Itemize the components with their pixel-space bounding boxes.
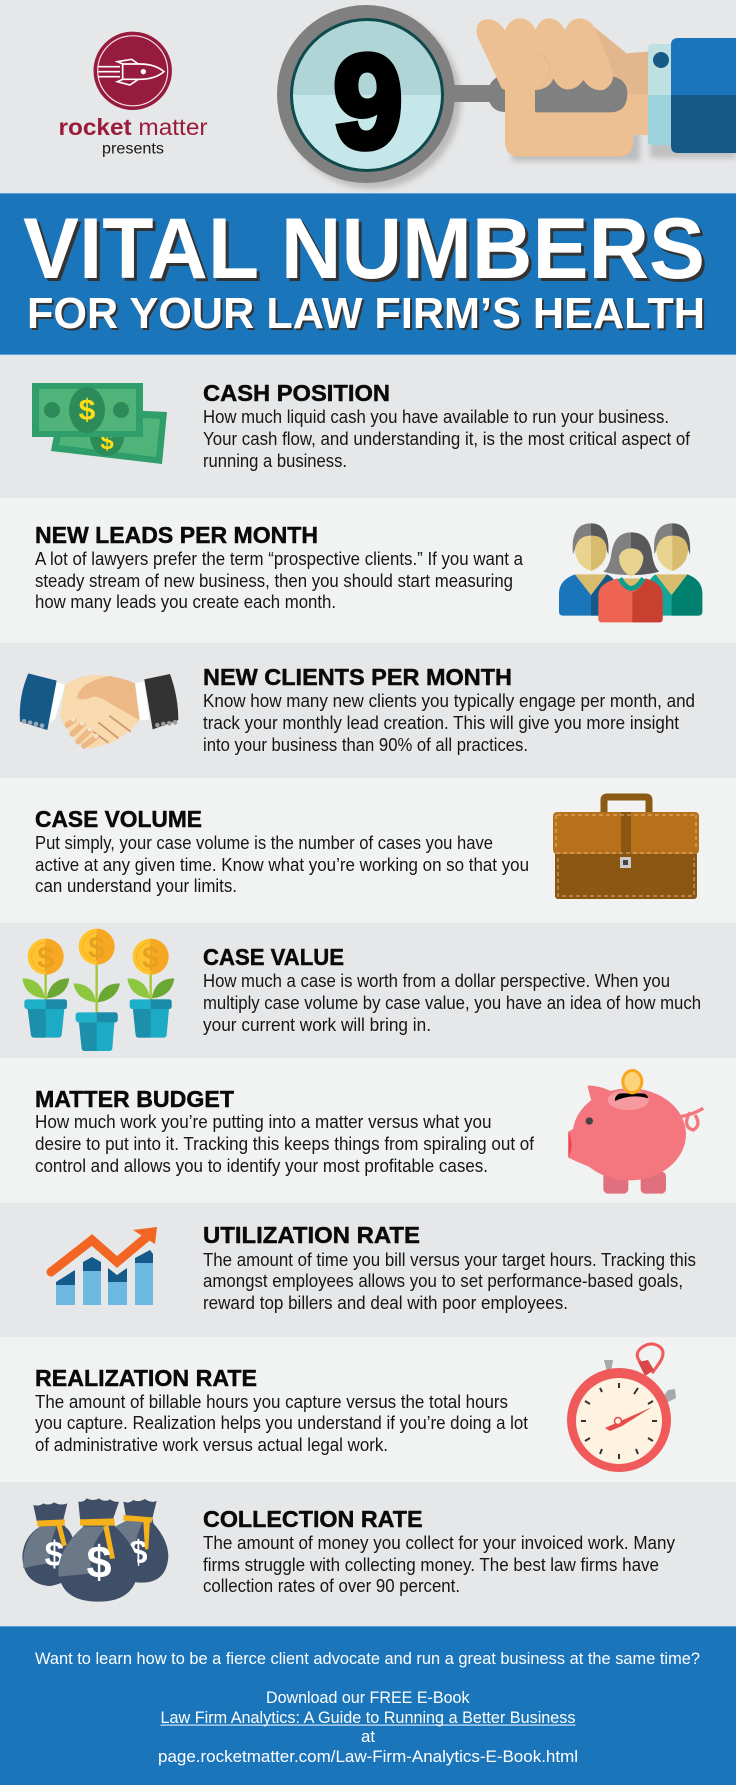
body text: control and allows you to identify your most profitable cases. <box>35 1156 488 1176</box>
body text <box>203 691 695 755</box>
logo: rocket matter: rocket matter <box>58 114 208 140</box>
body text: A lot of lawyers prefer the term “prospective clients.” If you want a <box>35 549 524 569</box>
body text: you capture. Realization helps you understand if you’re doing a lot <box>35 1413 528 1433</box>
heading: COLLECTION RATE <box>203 1506 422 1532</box>
body text: steady stream of new business, then you should start measuring <box>35 571 513 591</box>
body text <box>35 833 529 896</box>
footer download line: Download our FREE E-Book <box>266 1688 470 1707</box>
panel: realization rate <box>0 1337 736 1482</box>
icon: dollar bills: $ <box>100 428 114 455</box>
body text: How much a case is worth from a dollar perspective. When you <box>203 971 670 991</box>
panel: utilization rate <box>0 1203 736 1337</box>
heading: CASH POSITION <box>203 380 390 406</box>
heading: NEW CLIENTS PER MONTH <box>203 664 512 690</box>
heading: MATTER BUDGET <box>35 1086 234 1112</box>
logo: rocket matter <box>58 32 208 157</box>
body text <box>203 1250 696 1313</box>
icon: coin plants: $ <box>88 931 105 965</box>
panel: case value <box>0 923 736 1058</box>
body text: firms struggle with collecting money. The best law firms have <box>203 1555 659 1575</box>
body text: of administrative work versus actual legal work. <box>35 1435 388 1455</box>
body text: The amount of time you bill versus your target hours. Tracking this <box>203 1250 696 1270</box>
icon: piggy bank <box>568 1069 703 1194</box>
icon: dollar bills <box>32 383 167 464</box>
icon: coin plants <box>22 929 174 1051</box>
body text <box>203 1533 675 1596</box>
body text: active at any given time. Know what you’re working on so that you <box>35 855 529 875</box>
icon: money bags: $ <box>129 1534 148 1571</box>
heading: NEW LEADS PER MONTH <box>35 522 318 548</box>
panel: new clients per month <box>0 643 736 778</box>
heading: REALIZATION RATE <box>35 1365 257 1391</box>
icon: growth chart <box>51 1227 157 1305</box>
body text: can understand your limits. <box>35 876 237 896</box>
body text: Your cash flow, and understanding it, is the most critical aspect of <box>203 429 691 449</box>
body text: collection rates of over 90 percent. <box>203 1576 460 1596</box>
body text: running a business. <box>203 451 347 471</box>
icon: three people <box>559 523 702 622</box>
jacket sleeve <box>671 38 736 95</box>
body text: how many leads you create each month. <box>35 592 336 612</box>
heading: CASE VOLUME <box>35 806 202 832</box>
footer call to action <box>0 1626 736 1785</box>
body text: Know how many new clients you typically engage per month, and <box>203 691 695 711</box>
icon: dollar bills: $ <box>79 394 96 427</box>
body text: your current work will bring in. <box>203 1015 431 1035</box>
number 9: 9 <box>334 28 402 175</box>
body text: The amount of billable hours you capture versus the total hours <box>35 1392 508 1412</box>
body text: How much work you’re putting into a matter versus what you <box>35 1112 492 1132</box>
icon: money bags: $ <box>86 1537 112 1588</box>
icon: briefcase <box>553 797 699 899</box>
body text <box>203 407 691 471</box>
title line 1: VITAL NUMBERS <box>23 201 705 297</box>
body text: track your monthly lead creation. This will give you more insight <box>203 713 679 733</box>
body text <box>35 1112 535 1176</box>
title line 2: FOR YOUR LAW FIRM’S HEALTH <box>27 289 705 338</box>
panel: new leads per month <box>0 498 736 643</box>
body text <box>35 549 524 612</box>
panel: collection rate <box>0 1482 736 1626</box>
icon: money bags: $ <box>45 1535 64 1574</box>
body text: Put simply, your case volume is the number of cases you have <box>35 833 493 853</box>
body text: The amount of money you collect for your invoiced work. Many <box>203 1533 675 1553</box>
shirt cuff <box>648 44 672 95</box>
heading: CASE VALUE <box>203 944 344 970</box>
heading: UTILIZATION RATE <box>203 1222 420 1248</box>
body text <box>203 971 701 1035</box>
footer url: page.rocketmatter.com/Law-Firm-Analytics-E-Book.html <box>158 1747 578 1766</box>
panel: case volume <box>0 778 736 923</box>
logo: rocket matter: presents <box>102 140 164 158</box>
icon: handshake <box>20 673 178 748</box>
footer question: Want to learn how to be a fierce client advocate and run a great business at the same time? <box>35 1649 700 1668</box>
footer e-book title: Law Firm Analytics: A Guide to Running a Better Business <box>160 1708 576 1727</box>
body text: desire to put into it. Tracking this keeps things from spiraling out of <box>35 1134 535 1154</box>
title banner <box>0 193 736 355</box>
body text: multiply case volume by case value, you have an idea of how much <box>203 993 701 1013</box>
body text: How much liquid cash you have available to run your business. <box>203 407 669 427</box>
header <box>0 0 736 193</box>
icon: coin plants: $ <box>37 941 54 975</box>
icon: money bags <box>22 1498 168 1602</box>
body text <box>35 1392 528 1455</box>
body text: into your business than 90% of all practices. <box>203 735 528 755</box>
body text: amongst employees allows you to set performance-based goals, <box>203 1271 683 1291</box>
icon: coin plants: $ <box>142 941 159 975</box>
icon: stopwatch <box>567 1344 676 1472</box>
panel: cash position <box>0 355 736 498</box>
panel: matter budget <box>0 1058 736 1203</box>
hand holding the magnifier <box>476 18 736 161</box>
body text: reward top billers and deal with poor employees. <box>203 1293 568 1313</box>
footer at: at <box>361 1727 375 1746</box>
magnifying glass with number 9 <box>277 5 510 189</box>
